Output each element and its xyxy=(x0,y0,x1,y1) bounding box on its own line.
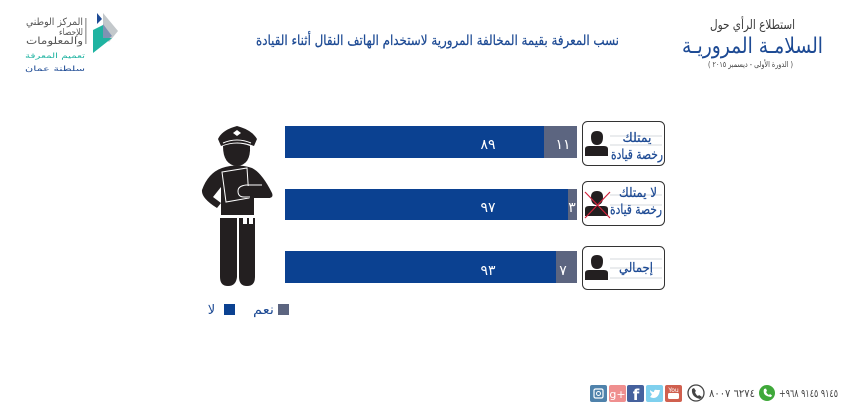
contact and social strip xyxy=(590,385,838,404)
icon: telephone xyxy=(688,385,704,401)
icon: person xyxy=(585,255,608,280)
hand xyxy=(238,186,270,198)
logo: national centre for statistics and information xyxy=(25,13,118,73)
icon: youtube xyxy=(665,385,682,402)
logo text: تعميم المعرفة xyxy=(25,52,85,60)
legend xyxy=(208,303,289,318)
bar: no licence: ٣ xyxy=(568,200,576,216)
icon: instagram xyxy=(590,385,607,402)
logo text: للإحصاء xyxy=(59,28,83,38)
icon: facebook xyxy=(627,385,644,404)
survey round: ( الدورة الأولى - ديسمبر ٢٠١٥ ) xyxy=(708,59,793,69)
bar chart xyxy=(285,126,577,283)
icon: google plus: g+ xyxy=(609,388,626,401)
bar: total: ٩٣ xyxy=(480,263,496,279)
icon: youtube: You xyxy=(667,387,679,394)
icon: person xyxy=(585,131,608,156)
bar: no licence xyxy=(285,189,577,220)
logo text: سلطنة عمان xyxy=(25,65,85,73)
row label: no licence: رخصة قيادة xyxy=(610,202,662,218)
row label: total: إجمالي xyxy=(619,261,653,276)
logo text: المركز الوطني xyxy=(26,17,83,28)
row label: holds licence xyxy=(582,122,664,166)
row label: holds licence: يمتلك xyxy=(622,131,652,146)
icon: crossed-out person xyxy=(585,191,610,218)
bar: no licence: ٩٧ xyxy=(480,200,496,216)
torso and arms xyxy=(202,166,272,215)
logo mark xyxy=(93,13,118,53)
logo text: والمعلومات xyxy=(26,36,83,47)
bar: holds licence xyxy=(285,126,577,158)
icon: facebook: f xyxy=(633,386,640,404)
icon: whatsapp xyxy=(759,385,775,401)
icon: twitter xyxy=(646,385,663,402)
bar: total xyxy=(285,251,577,283)
icon: police officer with clipboard xyxy=(202,126,272,286)
clipboard xyxy=(222,168,249,202)
whatsapp number: +٩٦٨ ٩١٤٥ ٩١٤٥ xyxy=(779,387,838,400)
survey title: السلامـة المروريـة xyxy=(682,34,823,59)
bar: total: ٧ xyxy=(559,263,567,279)
legs xyxy=(220,218,237,286)
row label: holds licence: رخصة قيادة xyxy=(611,147,663,163)
row label: no licence: لا يمتلك xyxy=(619,186,657,201)
holster xyxy=(243,215,253,224)
survey title block xyxy=(682,16,823,69)
survey label: استطلاع الرأي حول xyxy=(710,16,795,33)
legend: no: لا xyxy=(208,303,215,318)
phone number: ٨٠٠٧ ٦٢٧٤ xyxy=(709,387,755,400)
bar: holds licence: ٨٩ xyxy=(480,137,496,153)
row label: total xyxy=(582,246,664,290)
logo text xyxy=(25,17,85,73)
main heading: نسب المعرفة بقيمة المخالفة المرورية لاستخدام الهاتف النقال أثناء القيادة xyxy=(256,31,619,49)
legend: yes: نعم xyxy=(253,303,274,318)
head xyxy=(223,144,250,166)
row label: no licence xyxy=(582,182,664,226)
bar: holds licence: ١١ xyxy=(555,137,571,153)
hat xyxy=(218,126,257,146)
